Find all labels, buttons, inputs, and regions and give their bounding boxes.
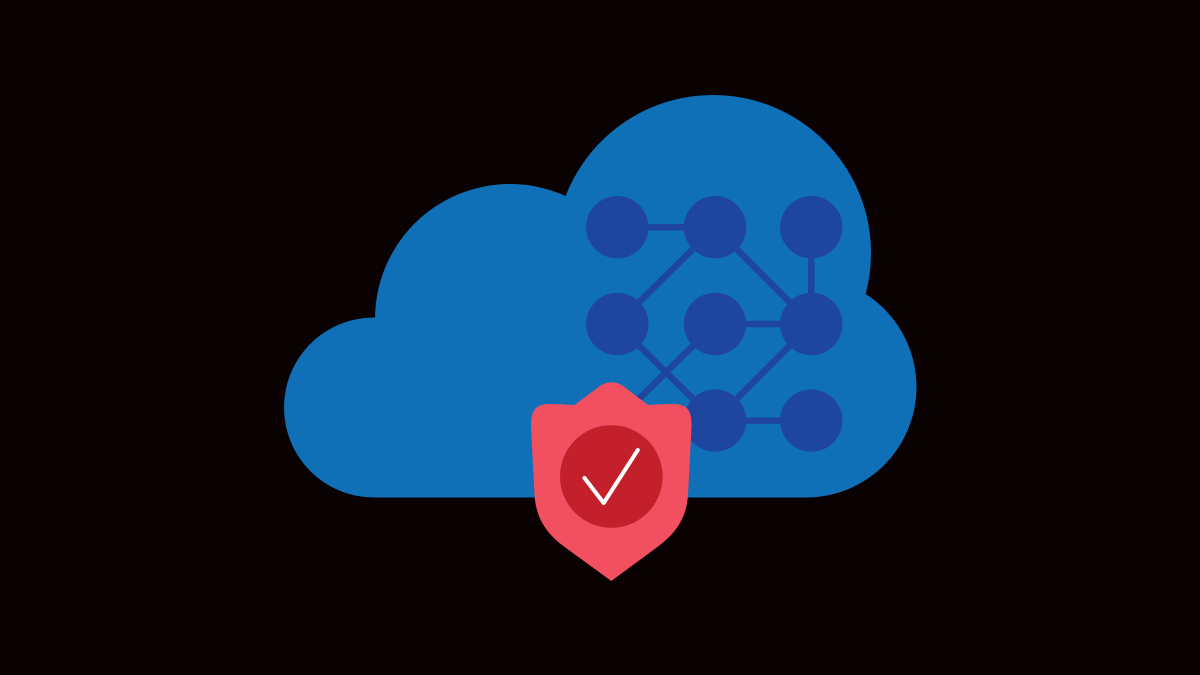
check mark	[584, 450, 638, 503]
network nodes	[586, 196, 842, 452]
icon: cloud	[284, 95, 916, 498]
network diagram	[586, 196, 842, 452]
network links	[617, 227, 811, 421]
shield body	[531, 382, 692, 581]
icon: security shield	[531, 382, 692, 581]
shield inner circle	[560, 425, 663, 528]
